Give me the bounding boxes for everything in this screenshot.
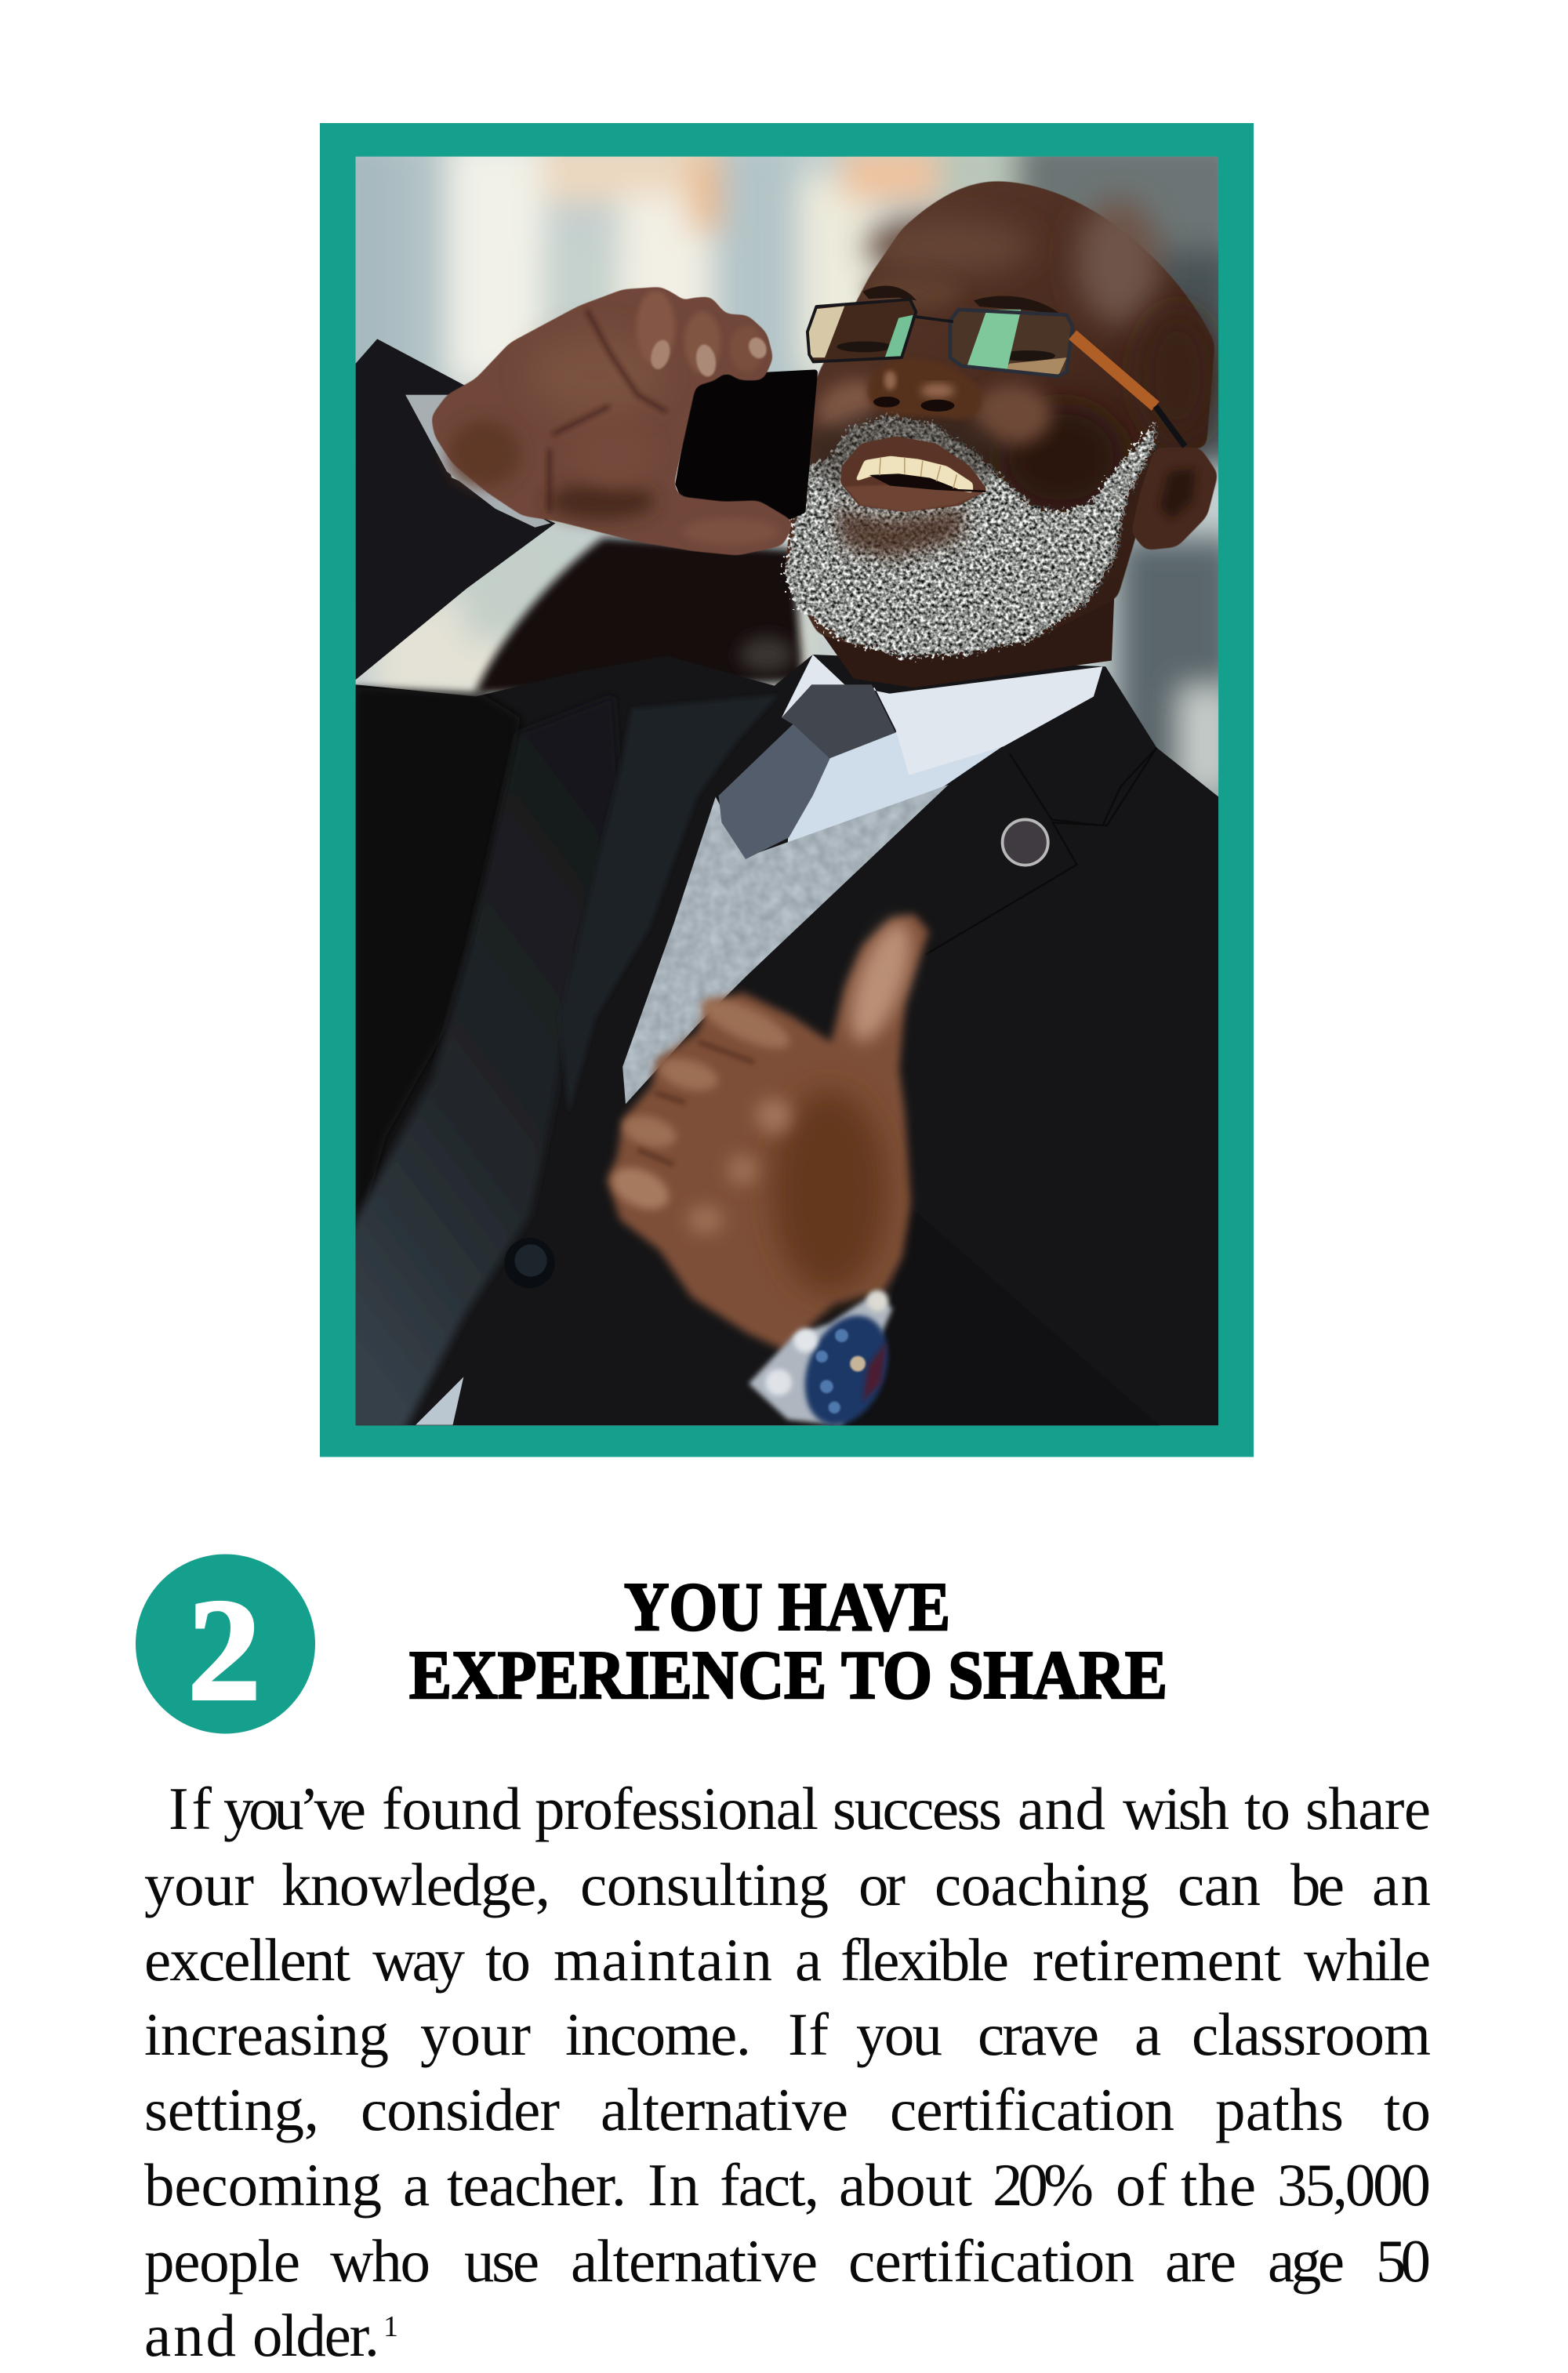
body paragraph: income. [565,2001,751,2068]
body paragraph: use [464,2227,539,2295]
body paragraph: wish [1123,1775,1229,1842]
body paragraph: and [144,2302,236,2369]
beard [785,415,1156,658]
heading: YOU HAVE [624,1569,950,1645]
body paragraph: age [1268,2227,1345,2295]
body paragraph: professional [535,1775,818,1842]
jacket front panel with soft sheen [356,734,584,1425]
neck [822,598,1115,688]
number badge [136,1554,315,1734]
shirt and collar [782,655,1102,847]
facial shading [808,198,1217,511]
body paragraph: or [858,1851,906,1918]
body paragraph: becoming [144,2151,382,2219]
body paragraph: older. [252,2302,379,2369]
body paragraph: consider [361,2076,560,2143]
body paragraph: 50 [1376,2227,1431,2295]
body paragraph: to [1244,1775,1290,1842]
sweater vest [622,785,949,1104]
number badge: 2 [188,1569,260,1731]
body paragraph: while [1304,1926,1431,1994]
body paragraph: In [648,2151,699,2219]
shading around mouth [806,408,1004,559]
right lapel edge [926,748,1156,955]
jacket cuff at wrist [829,1210,1160,1425]
wristwatch [749,1290,903,1438]
tie [719,684,895,859]
body paragraph: you’ve [223,1775,366,1842]
body paragraph: 20% [993,2151,1094,2219]
body paragraph: to [1384,2076,1431,2143]
body paragraph: crave [978,2001,1099,2068]
body paragraph: flexible [840,1926,1009,1994]
ear [1136,452,1214,546]
body paragraph: alternative [571,2227,818,2295]
hand holding phone [435,290,789,551]
body paragraph: and [1018,1775,1105,1842]
body paragraph: be [1290,1851,1345,1918]
body paragraph: increasing [144,2001,389,2068]
body paragraph: the [1181,2151,1256,2219]
body paragraph: success [833,1775,1002,1842]
body paragraph: consulting [580,1851,829,1918]
body paragraph: an [1372,1851,1431,1918]
glasses [808,299,1185,446]
jacket button [504,1238,555,1288]
body paragraph: are [1165,2227,1236,2295]
body paragraph: teacher. [447,2151,626,2219]
body paragraph: 1 [383,2310,398,2343]
nose [867,359,982,419]
body paragraph: excellent [144,1926,350,1994]
body paragraph [144,1775,1431,2369]
body paragraph: If [788,2001,829,2068]
photo frame [320,123,1254,1457]
body paragraph: certification [848,2227,1134,2295]
body paragraph: setting, [144,2076,319,2143]
body paragraph: maintain [554,1926,772,1994]
photograph: smiling businessman on phone giving a thumbs up [338,136,1243,1438]
body paragraph: classroom [1192,2001,1431,2068]
body paragraph: people [144,2227,300,2295]
body paragraph: coaching [935,1851,1149,1918]
mouth with teeth [840,436,987,512]
raised sleeve [356,339,555,680]
head [785,181,1215,645]
body paragraph: fact, [720,2151,819,2219]
body paragraph: a [403,2151,430,2219]
body paragraph: 35,000 [1277,2151,1431,2219]
body paragraph: can [1178,1851,1261,1918]
brows [862,285,1064,317]
body paragraph: found [382,1775,521,1842]
heading [409,1569,1167,1714]
body paragraph: your [420,2001,531,2068]
body paragraph: alternative [601,2076,848,2143]
body paragraph: a [1134,2001,1161,2068]
body paragraph: knowledge, [281,1851,550,1918]
body paragraph: your [144,1851,254,1918]
thumbs-up fist [606,914,929,1351]
body paragraph: to [485,1926,531,1994]
body paragraph: about [839,2151,972,2219]
body paragraph: who [330,2227,430,2295]
jacket body [356,655,1218,1425]
heading: EXPERIENCE TO SHARE [409,1638,1167,1714]
phone [670,372,815,517]
blurred chair behind [475,538,803,694]
lapel pin [1003,819,1048,865]
body paragraph: a [795,1926,822,1994]
body paragraph: certification [890,2076,1174,2143]
shirt cuff [405,395,550,528]
body paragraph: retirement [1033,1926,1281,1994]
body paragraph: you [856,2001,942,2068]
body paragraph: paths [1215,2076,1344,2143]
body paragraph: way [372,1926,466,1994]
body paragraph: of [1116,2151,1167,2219]
body paragraph: share [1305,1775,1431,1842]
body paragraph: If [169,1775,212,1842]
